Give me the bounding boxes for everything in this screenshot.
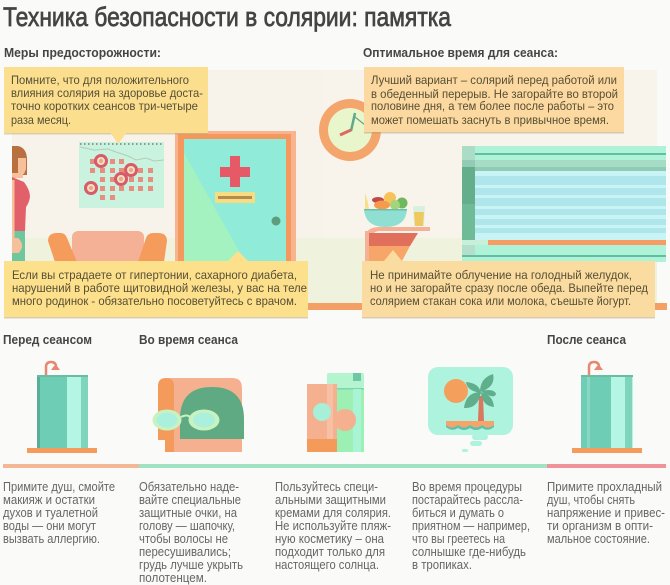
callout: session frequency: раза месяц. — [11, 113, 71, 127]
illustration: woman — [12, 146, 30, 261]
callout: see a doctor: Если вы страдаете от гипертонии, сахарного диабета, — [12, 268, 297, 282]
text: relax: Во время процедуры — [412, 479, 522, 494]
text: goggles and cap: Обязательно наде- — [139, 479, 239, 494]
callout: see a doctor: много родинок - обязательно посоветуйтесь с врачом. — [12, 294, 297, 308]
icon: shower after — [572, 362, 642, 453]
text: before session: Примите душ, смойте — [3, 479, 115, 494]
text: protective creams — [275, 479, 391, 572]
text: goggles and cap: пересушивались; — [139, 544, 231, 559]
callout: session frequency — [4, 67, 208, 144]
callout: best time: может помешать заснуть в привычное время. — [371, 113, 609, 127]
illustration: door with red cross — [175, 131, 296, 303]
callout: session frequency: Помните, что для положительного — [11, 73, 189, 87]
callout: best time: Лучший вариант – солярий перед работой или — [371, 73, 617, 87]
illustration: solarium — [462, 146, 666, 262]
text: before session: воды — они могут — [3, 518, 96, 533]
heading: precautions: Меры предосторожности: — [4, 46, 161, 60]
title: Техника безопасности в солярии: памятка — [3, 2, 452, 32]
text: protective creams: кремами для солярия. — [275, 505, 391, 520]
icon: towel, cap and goggles — [152, 378, 244, 452]
text: relax: в тропиках. — [412, 557, 472, 572]
text: goggles and cap: чтобы волосы не — [139, 531, 228, 546]
icon: red cross — [220, 156, 250, 187]
text: protective creams: альными защитными — [275, 492, 386, 507]
text: goggles and cap — [139, 479, 243, 585]
callout: session frequency: влияния солярия на здоровье доста- — [11, 86, 203, 100]
text: before session — [3, 479, 115, 546]
callout: food before session — [362, 250, 655, 318]
icon: shower before — [27, 362, 97, 453]
callout: best time — [364, 67, 624, 134]
text: relax: солнышке где-нибудь — [412, 544, 526, 559]
text: protective creams: настоящего солнца. — [275, 557, 379, 572]
text: after session: мальное состояние. — [547, 531, 650, 546]
icon: thought bubble with palm — [428, 367, 513, 452]
callout: best time: в обеденный перерыв. Не загорайте во второй — [371, 87, 618, 101]
heading: during session: Во время сеанса — [139, 333, 239, 347]
text: protective creams: Пользуйтесь специ- — [275, 479, 378, 494]
panel: room scene — [12, 70, 667, 310]
heading: after session: После сеанса — [547, 333, 627, 347]
illustration: sofa — [48, 231, 167, 271]
callout: session frequency: точно коротких сеансов три-четыре — [11, 99, 198, 113]
callout: see a doctor — [4, 251, 308, 318]
text: before session: духов и туалетной — [3, 505, 98, 520]
text: relax: постарайтесь рассла- — [412, 492, 523, 507]
door knob — [272, 216, 280, 226]
text: goggles and cap: вайте специальные — [139, 492, 241, 507]
text: protective creams: подходит только для — [275, 544, 385, 559]
text: after session — [547, 479, 665, 546]
text: relax: приятном — например, — [412, 518, 530, 533]
text: relax: что вы греетесь на — [412, 531, 506, 546]
text: after session: ти организм в опти- — [547, 518, 653, 533]
illustration: fruit bowl and juice — [364, 192, 430, 267]
text: relax: биться и думать о — [412, 505, 504, 520]
text: goggles and cap: защитные очки, на — [139, 505, 238, 520]
callout: see a doctor: нарушений в работе щитовидной железы, у вас на теле — [12, 281, 307, 295]
callout: food before session: но и не загорайте сразу после обеда. Выпейте перед — [370, 281, 648, 295]
illustration: wall clock — [319, 99, 381, 161]
text: relax — [412, 479, 530, 572]
heading: before session: Перед сеансом — [3, 333, 92, 347]
text: goggles and cap: голову — шапочку, — [139, 518, 235, 533]
juice glass — [413, 206, 425, 226]
callout: food before session: солярием стакан сока или молока, съешьте йогурт. — [370, 294, 631, 308]
callout: food before session: Не принимайте облучение на голодный желудок, — [370, 268, 632, 282]
icon: sun cream tubes — [307, 373, 364, 452]
illustration: calendar — [79, 142, 164, 208]
text: goggles and cap: полотенцем. — [139, 570, 207, 585]
text: before session: вызвать аллергию. — [3, 531, 100, 546]
text: goggles and cap: грудь лучше укрыть — [139, 557, 243, 572]
heading: optimal time: Оптимальное время для сеанса: — [363, 46, 558, 60]
callout: best time: половине дня, а тем более после работы – это — [371, 99, 614, 113]
text: protective creams: Не используйте пляж- — [275, 518, 391, 533]
door plate — [215, 192, 255, 203]
text: before session: макияж и остатки — [3, 492, 95, 507]
side table — [365, 227, 430, 267]
timeline bar — [3, 464, 666, 468]
text: after session: душ, чтобы снять — [547, 492, 635, 507]
text: protective creams: ную косметику – она — [275, 531, 385, 546]
